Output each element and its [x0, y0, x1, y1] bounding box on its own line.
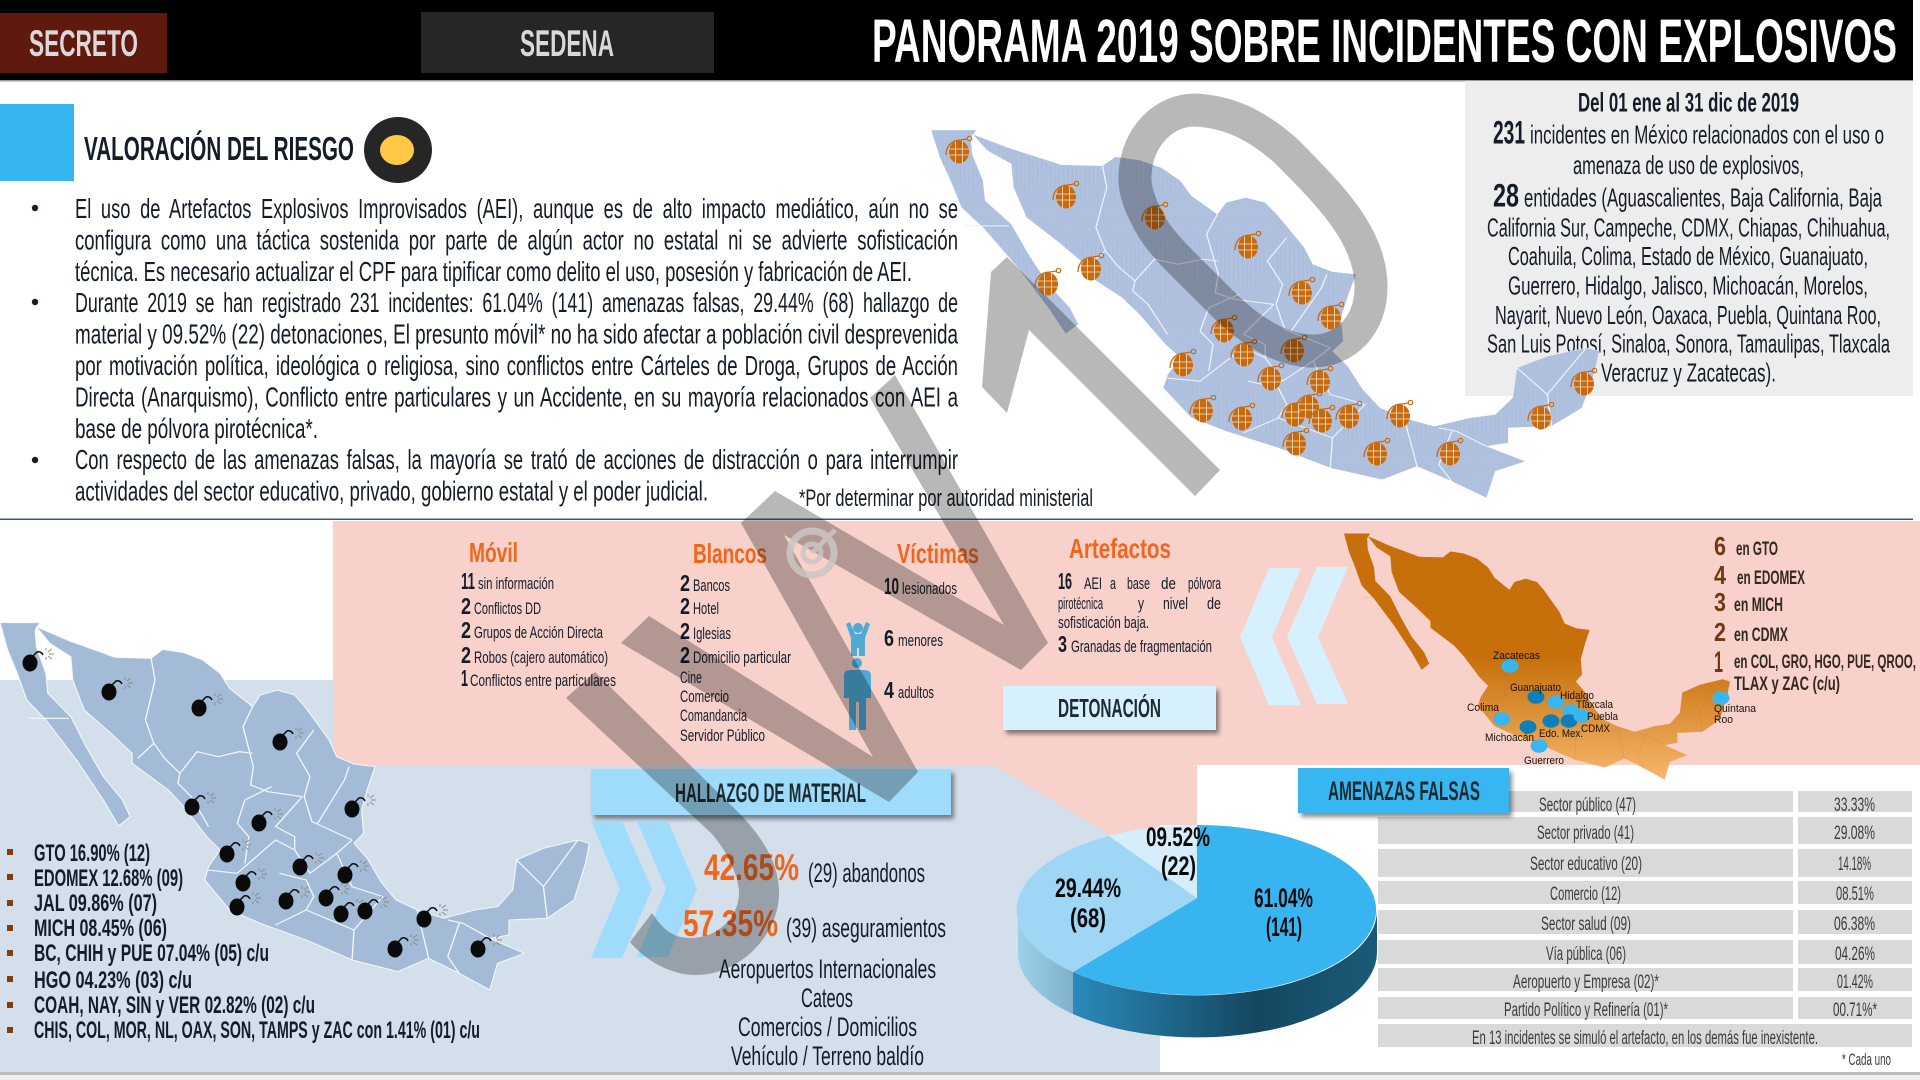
map: detonations by state: Quintana [1714, 703, 1757, 715]
list: Blancos: Bancos [693, 576, 730, 595]
list: Victimas: Víctimas [897, 538, 979, 569]
list: Movil: 2 [461, 593, 471, 619]
pie chart: incident types: (141) [1266, 912, 1302, 942]
list: Movil: Grupos de Acción Directa [474, 623, 603, 642]
list: Artefactos: a [1110, 574, 1116, 593]
panel: hallazgo background [0, 680, 1160, 1072]
panel: period summary: Veracruz y Zacatecas). [1601, 358, 1776, 388]
table: false threats by sector: Partido Político y Refinería (01)* [1504, 1000, 1668, 1021]
label: AMENAZAS FALSAS: AMENAZAS FALSAS [1328, 776, 1480, 806]
stats: material found [683, 847, 946, 944]
list: Victimas: 6 [884, 625, 894, 651]
label: HALLAZGO DE MATERIAL: HALLAZGO DE MATERIAL [675, 778, 866, 808]
icon: target [790, 530, 835, 575]
list: Blancos: 2 [680, 618, 690, 644]
heading: risk assessment [0, 104, 432, 183]
list: Artefactos: 16 [1058, 568, 1072, 594]
legend: detonations per state: en CDMX [1734, 625, 1788, 646]
pie chart: incident types: 61.04% [1254, 883, 1313, 913]
text block: risk assessment bullets: El uso de Artefactos Explosivos Improvisados (AEI), aunque es de alto impacto mediático, aún no se [75, 193, 958, 224]
list: Artefactos: 3 [1058, 631, 1067, 657]
table: false threats by sector: 14.18% [1838, 854, 1871, 875]
table: false threats by sector [1378, 791, 1912, 1069]
label: DETONACION: DETONACIÓN [1058, 693, 1161, 723]
list: Artefactos: pirotécnica [1058, 594, 1103, 613]
list: Blancos: 2 [680, 642, 690, 668]
legend: detonations per state [1714, 531, 1916, 695]
list: Victimas [884, 538, 979, 703]
list: Movil: 2 [461, 642, 471, 668]
pie chart: incident types: 09.52% [1146, 822, 1210, 852]
list: Blancos: 2 [680, 570, 690, 596]
map: detonations by state: Roo [1714, 714, 1733, 726]
label: AMENAZAS FALSAS [1298, 768, 1509, 813]
text block: risk assessment bullets: técnica. Es necesario actualizar el CPF para tipificar como delito el uso, posesión y fabricación de AEI. [75, 256, 912, 287]
table: false threats by sector: 08.51% [1836, 884, 1874, 905]
map: detonations by state: Edo. Mex. [1539, 728, 1583, 740]
text block: risk assessment bullets: material y 09.52% (22) detonaciones, El presunto móvil* no ha sido afectar a población civil desprevenida [75, 319, 958, 350]
bottom rule [0, 1072, 1920, 1080]
table: false threats by sector: Aeropuerto y Empresa (02)* [1513, 972, 1659, 993]
classification label: SECRETO [0, 13, 167, 73]
map: detonations by state: Puebla [1587, 711, 1619, 723]
list: Movil: Conflictos DD [474, 599, 541, 618]
icon: risk level indicator [364, 117, 432, 183]
text block: locations: Aeropuertos Internacionales [719, 954, 936, 984]
list: Blancos: Servidor Público [680, 726, 765, 745]
text block: locations: Vehículo / Terreno baldío [731, 1041, 924, 1071]
table: false threats by sector: 06.38% [1834, 914, 1875, 935]
stats: material found: (39) aseguramientos [786, 913, 946, 943]
text block: risk assessment bullets: por motivación política, ideológica o religiosa, sino conflictos entre Cárteles de Droga, Grupos de Acción [75, 350, 958, 381]
header band [0, 0, 1913, 82]
map: material found with bomb markers [0, 623, 589, 990]
legend: detonations per state: 4 [1714, 560, 1726, 590]
legend: detonations per state: 3 [1714, 587, 1726, 617]
list: Movil: 11 [461, 568, 475, 594]
table: false threats by sector: 01.42% [1837, 972, 1873, 993]
list: material found by state: EDOMEX 12.68% (09) [34, 865, 183, 892]
text block: locations [719, 954, 936, 1071]
list: Movil: Robos (cajero automático) [474, 648, 608, 667]
text block: risk assessment bullets: Con respecto de las amenazas falsas, la mayoría se trató de acciones de distracción o para interrumpir [75, 444, 958, 475]
text block: risk assessment bullets [32, 193, 958, 507]
footnote: *Por determinar por autoridad ministerial [799, 485, 1093, 512]
table: false threats by sector: Vía pública (06) [1546, 944, 1626, 965]
list: Artefactos: nivel [1163, 594, 1188, 613]
legend: detonations per state: 6 [1714, 531, 1726, 561]
text block: risk assessment bullets: base de pólvora pirotécnica*. [75, 413, 318, 444]
watermark: large diagonal initials [566, 110, 1371, 975]
text block: risk assessment bullets: configura como una táctica sostenida por parte de algún actor no estatal ni se advierte sofisticación [75, 224, 958, 255]
list: Blancos [680, 538, 791, 745]
map: detonations by state: Hidalgo [1560, 690, 1594, 702]
table: false threats by sector: Sector salud (09) [1541, 914, 1631, 935]
table: false threats by sector: Comercio (12) [1550, 884, 1621, 905]
table: false threats by sector: Sector educativo (20) [1530, 854, 1642, 875]
list: material found by state: COAH, NAY, SIN y VER 02.82% (02) c/u [34, 992, 315, 1019]
label: HALLAZGO DE MATERIAL [591, 769, 951, 815]
map: detonations by state [1344, 533, 1757, 780]
list: Blancos: Comandancia [680, 706, 747, 725]
list: Movil: Conflictos entre particulares [470, 671, 616, 690]
list: Blancos: Blancos [693, 538, 767, 569]
list: Artefactos: Artefactos [1069, 533, 1171, 564]
list: Blancos: 2 [680, 593, 690, 619]
map: detonations by state: Guerrero [1524, 755, 1564, 767]
list: material found by state: JAL 09.86% (07) [34, 890, 157, 917]
stats: material found: 57.35% [683, 903, 778, 944]
list: Artefactos: pólvora [1188, 574, 1221, 593]
text block: risk assessment bullets: Directa (Anarquismo), Conflicto entre particulares y un Accidente, en su mayoría relacionados con AEI a [75, 381, 958, 412]
legend: detonations per state: en EDOMEX [1737, 568, 1805, 589]
pink remainder beside pie [1119, 825, 1197, 845]
list: Blancos: Iglesias [693, 624, 731, 643]
table: false threats by sector: 29.08% [1834, 823, 1875, 844]
map: detonations by state: Colima [1467, 702, 1500, 714]
text block: locations: Comercios / Domicilios [738, 1012, 917, 1042]
list: Movil: sin información [478, 574, 554, 593]
panel: period summary: 28 [1493, 178, 1519, 214]
icon: child figure [846, 622, 870, 656]
list: Victimas: menores [898, 631, 943, 650]
legend: detonations per state: en GTO [1736, 539, 1778, 560]
pie chart: incident types [1017, 822, 1377, 1037]
list: Victimas: 4 [884, 677, 894, 703]
list: material found by state: GTO 16.90% (12) [34, 840, 150, 867]
list: Artefactos [1058, 533, 1221, 657]
stats: material found: (29) abandonos [808, 858, 925, 888]
text block: risk assessment bullets: Durante 2019 se han registrado 231 incidentes: 61.04% (141) amenazas falsas, 29.44% (68) hallazgo de [75, 287, 958, 318]
map: detonations by state: Tlaxcala [1576, 699, 1614, 711]
list: material found by state: MICH 08.45% (06) [34, 915, 167, 942]
list: Artefactos: Granadas de fragmentación [1071, 637, 1212, 656]
list: Victimas: 10 [884, 573, 899, 599]
list: Artefactos: sofisticación baja. [1058, 613, 1149, 632]
list: Movil: 1 [461, 665, 468, 691]
legend: detonations per state: 1 [1714, 646, 1723, 679]
label: DETONACION [1003, 686, 1216, 730]
pie chart: incident types: (68) [1070, 903, 1106, 933]
map: detonations by state: CDMX [1581, 723, 1611, 735]
list: Victimas: lesionados [902, 579, 957, 598]
list: Artefactos: base [1127, 574, 1150, 593]
list: material found by state: CHIS, COL, MOR, NL, OAX, SON, TAMPS y ZAC con 1.41% (01) c/u [34, 1017, 480, 1044]
stats: material found: 42.65% [704, 847, 799, 888]
map: detonations by state: Guanajuato [1510, 682, 1561, 694]
list: Artefactos: AEI [1084, 574, 1102, 593]
classification label: SECRETO: SECRETO [29, 23, 138, 64]
list: material found by state [7, 840, 480, 1044]
table: false threats by sector: 33.33% [1834, 795, 1875, 816]
arrows: right chevrons [591, 821, 697, 958]
list: Blancos: Domicilio particular [693, 648, 791, 667]
white area behind false threats [1197, 765, 1920, 825]
table: false threats by sector: 00.71%* [1833, 1000, 1877, 1021]
table: false threats by sector: 04.26% [1835, 944, 1875, 965]
legend: detonations per state: en MICH [1734, 595, 1783, 616]
heading: risk assessment: VALORACIÓN DEL RIESGO [84, 130, 354, 167]
table: false threats by sector: Sector público (47) [1539, 795, 1636, 816]
panel: period summary [1465, 81, 1913, 396]
table: false threats by sector: Sector privado (41) [1537, 823, 1634, 844]
list: Movil [461, 537, 616, 691]
list: Blancos: Cine [680, 668, 702, 687]
list: Blancos: Comercio [680, 687, 729, 706]
map: detonations by state: Michoacán [1485, 732, 1534, 744]
map: detonations by state: Zacatecas [1493, 650, 1540, 662]
pie chart: incident types: 29.44% [1055, 873, 1121, 903]
pie chart: incident types: (22) [1161, 851, 1196, 881]
legend: detonations per state: 2 [1714, 617, 1726, 647]
list: Victimas: adultos [898, 683, 934, 702]
legend: detonations per state: TLAX y ZAC (c/u) [1734, 674, 1840, 695]
divider [0, 518, 1913, 520]
list: Artefactos: de [1161, 574, 1176, 593]
text block: locations: Cateos [801, 983, 853, 1013]
list: Artefactos: y [1138, 594, 1144, 613]
arrows: left chevrons [1240, 567, 1348, 705]
white area lower right [1160, 825, 1920, 1072]
list: Artefactos: de [1207, 594, 1221, 613]
panel: period summary: 231 [1493, 114, 1525, 150]
map: incidents in Mexico with grenade markers [931, 130, 1599, 498]
list: Movil: Móvil [469, 537, 518, 568]
panel: detonacion background [333, 521, 1920, 860]
text block: risk assessment bullets: actividades del sector educativo, privado, gobierno estatal y el poder judicial. [75, 476, 708, 507]
icon: adult figure [844, 658, 871, 730]
list: Blancos: Hotel [693, 599, 719, 618]
list: material found by state: BC, CHIH y PUE 07.04% (05) c/u [34, 940, 269, 967]
list: Movil: 2 [461, 617, 471, 643]
agency label: SEDENA [421, 12, 714, 73]
list: material found by state: HGO 04.23% (03) c/u [34, 967, 192, 994]
agency label: SEDENA: SEDENA [520, 23, 614, 64]
